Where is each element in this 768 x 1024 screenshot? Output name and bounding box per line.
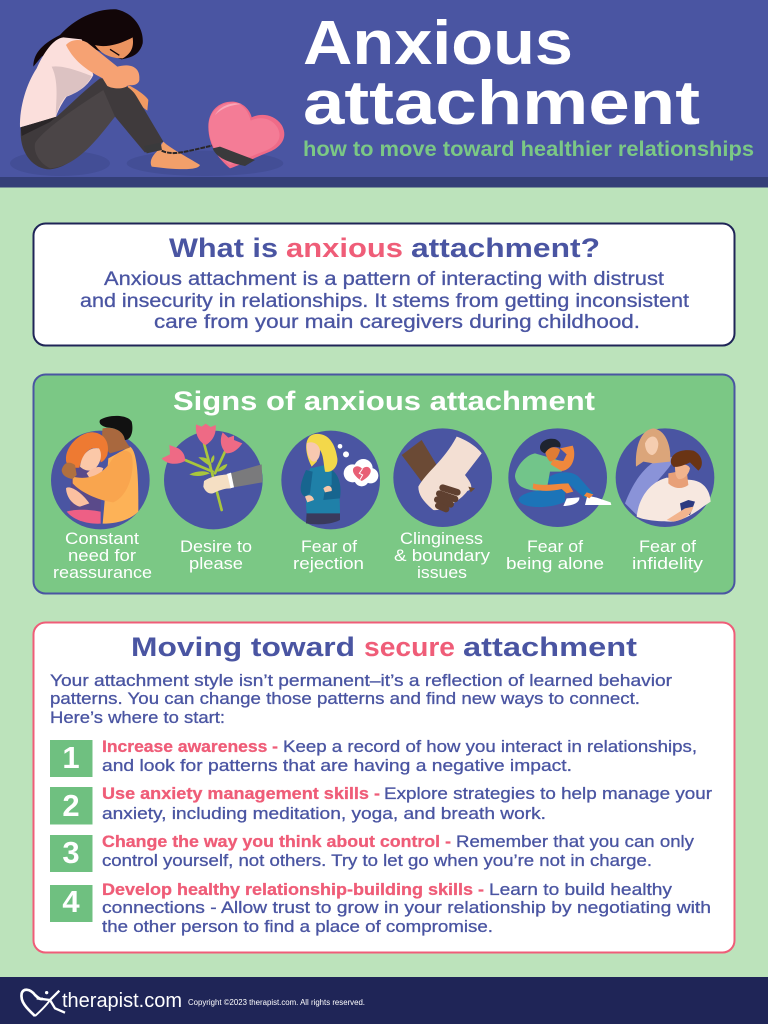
- panel: what is anxious attachment: [34, 224, 734, 346]
- step 4: Learn to build healthy: [489, 880, 673, 899]
- intro text: patterns. You can change those patterns and find new ways to connect.: [50, 689, 640, 708]
- heading: [131, 632, 637, 662]
- header banner: [0, 0, 768, 188]
- icon: hand offering flowers: [162, 424, 263, 529]
- step 3: Remember that you can only: [456, 832, 695, 851]
- copyright: Copyright ©2023 therapist.com. All rights reserved.: [188, 998, 365, 1007]
- icon: embracing couple: [51, 416, 150, 529]
- sign labels: Desire to: [180, 538, 252, 556]
- icon: couple and phone: [616, 428, 714, 527]
- definition text: Anxious attachment is a pattern of interacting with distrust: [104, 269, 665, 290]
- step 1: and look for patterns that are having a negative impact.: [102, 756, 572, 775]
- sign labels: infidelity: [632, 555, 704, 573]
- sign labels: please: [189, 555, 243, 573]
- title: attachment: [303, 69, 700, 138]
- intro text: Here’s where to start:: [50, 708, 225, 727]
- sign labels: Fear of: [639, 538, 696, 556]
- icon: holding hands: [393, 428, 492, 527]
- panel: signs of anxious attachment: [34, 374, 734, 594]
- heading: attachment: [463, 632, 637, 662]
- step 3: control yourself, not others. Try to let go when you’re not in charge.: [102, 851, 652, 870]
- step 4: the other person to find a place of compromise.: [102, 917, 493, 936]
- definition text: and insecurity in relationships. It stems from getting inconsistent: [80, 291, 690, 312]
- title: Anxious: [303, 9, 573, 78]
- sign labels: issues: [417, 564, 467, 582]
- step 2: anxiety, including meditation, yoga, and breath work.: [102, 804, 546, 823]
- heading: What is: [169, 233, 278, 263]
- step 3: 3: [62, 835, 80, 870]
- title: [303, 9, 700, 138]
- icon: man sitting alone: [508, 428, 611, 527]
- step 1: 1: [62, 740, 80, 775]
- step 4: connections - Allow trust to grow in your relationship by negotiating with: [102, 898, 711, 917]
- sign labels: being alone: [506, 555, 604, 573]
- panel: moving toward secure attachment: [34, 622, 734, 952]
- heading: [169, 233, 600, 263]
- step 4: 4: [62, 884, 80, 919]
- step 1: Keep a record of how you interact in relationships,: [283, 737, 697, 756]
- step 2: Explore strategies to help manage your: [384, 784, 712, 803]
- step 1: Increase awareness -: [102, 737, 278, 756]
- step 4: [50, 880, 711, 936]
- step 1: [50, 737, 697, 777]
- heading: secure: [364, 632, 455, 662]
- step 2: Use anxiety management skills -: [102, 784, 380, 803]
- heading: anxious: [286, 233, 403, 263]
- intro text: Your attachment style isn’t permanent–it’s a reflection of learned behavior: [50, 671, 672, 690]
- step 3: [50, 832, 695, 872]
- step 2: [50, 784, 712, 824]
- sign labels: [53, 530, 704, 582]
- sign labels: reassurance: [53, 564, 152, 582]
- icon: blonde woman fearing rejection: [281, 431, 380, 529]
- heading: attachment?: [411, 233, 600, 263]
- intro text: [50, 671, 672, 727]
- sign labels: need for: [68, 547, 137, 565]
- footer: [0, 977, 768, 1024]
- heading: Moving toward: [131, 632, 355, 662]
- step 4: Develop healthy relationship-building skills -: [102, 880, 484, 899]
- sign labels: Constant: [65, 530, 139, 548]
- sign labels: rejection: [293, 555, 364, 573]
- illustration: woman chained to heart: [10, 9, 284, 176]
- step 3: Change the way you think about control -: [102, 832, 451, 851]
- logo wordmark: therapist.com: [62, 990, 182, 1012]
- step 2: 2: [62, 788, 80, 823]
- sign labels: & boundary: [394, 547, 491, 565]
- sign labels: Fear of: [527, 538, 583, 556]
- sign labels: Clinginess: [400, 530, 483, 548]
- sign labels: Fear of: [301, 538, 357, 556]
- subtitle: how to move toward healthier relationships: [303, 138, 754, 161]
- definition text: [80, 269, 690, 333]
- icon: therapist logo: [21, 990, 65, 1016]
- heading: Signs of anxious attachment: [173, 386, 595, 416]
- definition text: care from your main caregivers during childhood.: [154, 312, 640, 333]
